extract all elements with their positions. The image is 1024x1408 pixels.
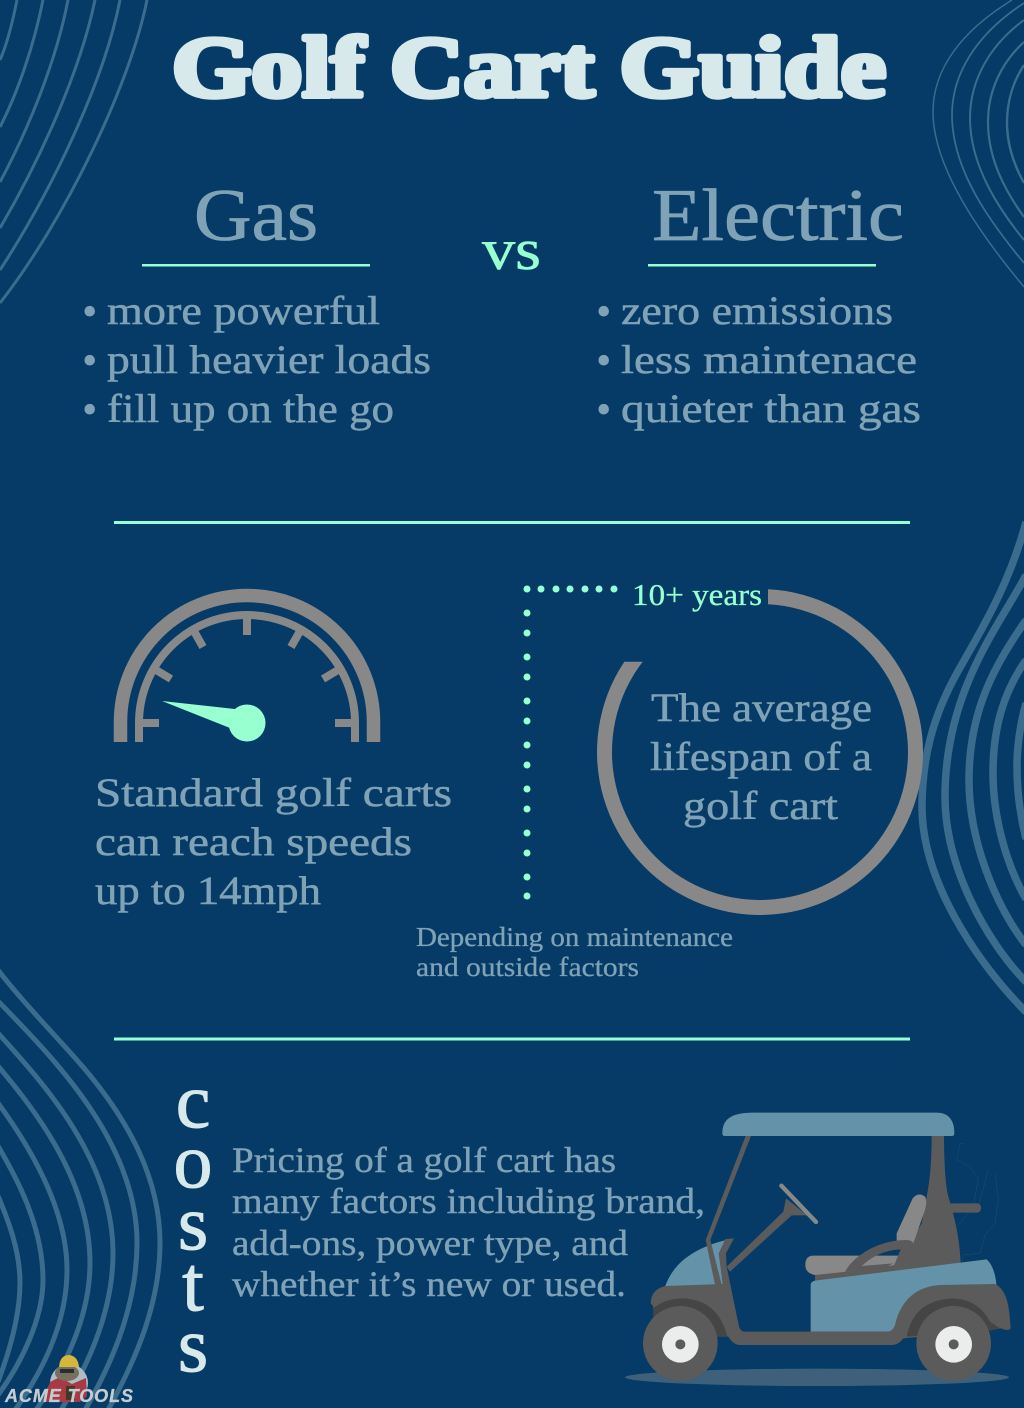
- heading: electric: Electric: [652, 175, 904, 257]
- speed text: Standard golf carts: [95, 770, 452, 815]
- heading: gas: Gas: [194, 175, 318, 257]
- gas bullet list: [82, 287, 431, 434]
- electric underline: [648, 264, 876, 266]
- lifespan text: lifespan of a: [650, 734, 872, 779]
- speed text: can reach speeds: [95, 819, 412, 864]
- costs text: whether it’s new or used.: [232, 1264, 626, 1304]
- years label: 10+ years: [632, 577, 762, 612]
- electric bullet list: •: [596, 287, 611, 336]
- gas bullet list: more powerful: [107, 288, 380, 333]
- panel: gas: [82, 175, 431, 434]
- costs text: [232, 1140, 705, 1304]
- electric bullet list: quieter than gas: [621, 386, 921, 431]
- divider: [114, 1038, 910, 1040]
- electric bullet list: zero emissions: [621, 288, 893, 333]
- gas bullet list: •: [82, 336, 97, 385]
- logo: acme tools: [4, 1355, 133, 1406]
- gas underline: [142, 264, 370, 266]
- vertical heading: costs: o: [174, 1117, 212, 1204]
- vertical heading: costs: t: [182, 1240, 204, 1327]
- electric bullet list: less maintenace: [621, 337, 917, 382]
- electric bullet list: [596, 287, 921, 434]
- dotted connector: [524, 586, 618, 900]
- lifespan footnote: Depending on maintenance: [416, 922, 733, 952]
- divider: [114, 521, 910, 524]
- vertical heading: costs: s: [178, 1179, 208, 1266]
- lifespan footnote: and outside factors: [416, 952, 639, 982]
- costs text: add-ons, power type, and: [232, 1223, 628, 1263]
- vs label: vs: [482, 217, 541, 282]
- gas bullet list: •: [82, 385, 97, 434]
- panel: electric: [596, 175, 921, 434]
- decorative waves: middle right: [922, 522, 1024, 1012]
- lifespan text: golf cart: [683, 783, 838, 828]
- logo: acme tools: ACME TOOLS: [4, 1386, 133, 1406]
- vertical heading: costs: [174, 1057, 212, 1388]
- lifespan text: [650, 685, 872, 828]
- gas bullet list: pull heavier loads: [107, 337, 431, 382]
- speed text: up to 14mph: [95, 868, 321, 913]
- electric bullet list: •: [596, 385, 611, 434]
- gas bullet list: •: [82, 287, 97, 336]
- lifespan text: The average: [651, 685, 872, 730]
- lifespan ring: [597, 589, 923, 915]
- decorative waves: top left: [0, 0, 147, 303]
- lifespan footnote: [416, 922, 733, 982]
- vertical heading: costs: c: [176, 1057, 210, 1144]
- costs text: Pricing of a golf cart has: [232, 1140, 616, 1180]
- title: Golf Cart Guide: [172, 19, 886, 115]
- gas bullet list: fill up on the go: [107, 386, 394, 431]
- icon: golf cart: [625, 1113, 1011, 1386]
- costs text: many factors including brand,: [232, 1181, 705, 1221]
- decorative waves: bottom left: [0, 970, 160, 1408]
- vertical heading: costs: s: [178, 1301, 208, 1388]
- speed text: [95, 770, 452, 913]
- decorative waves: top right: [933, 0, 1024, 287]
- electric bullet list: •: [596, 336, 611, 385]
- icon: speedometer: [120, 596, 374, 742]
